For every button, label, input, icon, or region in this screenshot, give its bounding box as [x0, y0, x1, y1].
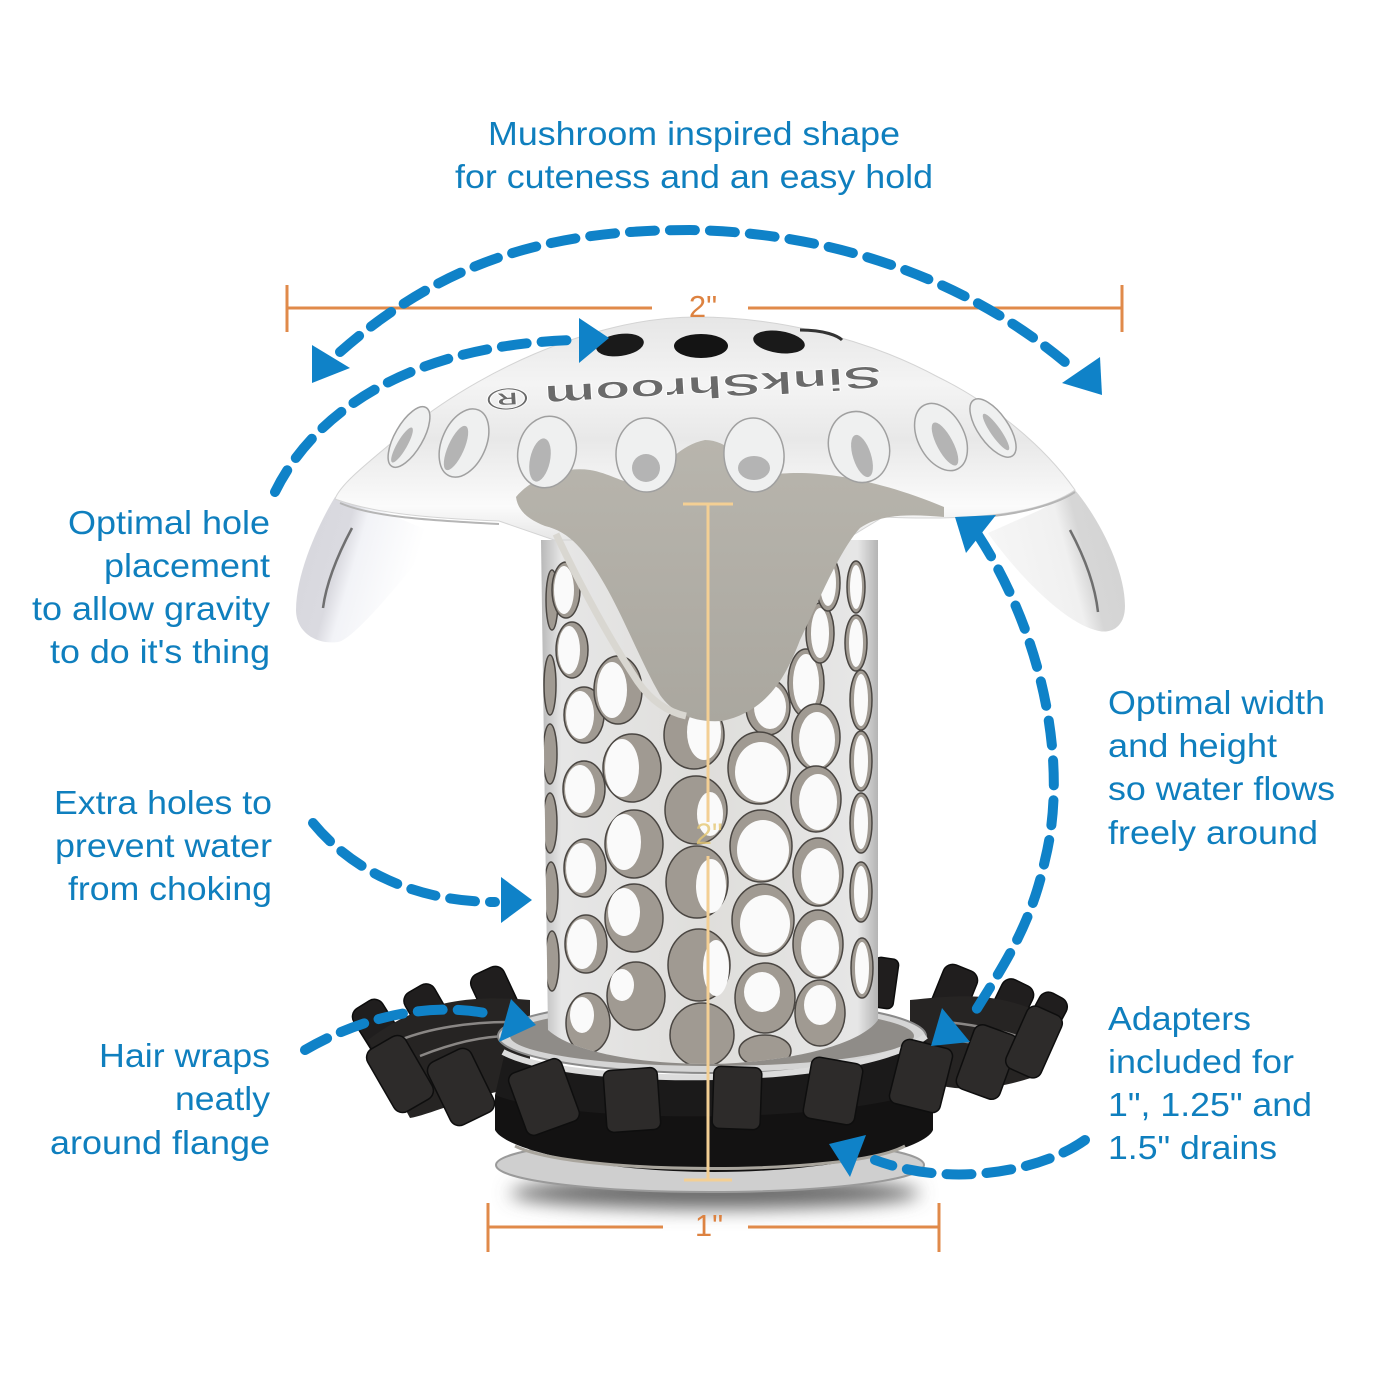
arrow: adapters — [829, 1135, 1085, 1177]
title: for cuteness and an easy hold — [455, 158, 933, 195]
embossed brand text: SinkShroom ® — [485, 359, 883, 417]
rim shadow line — [340, 492, 1075, 524]
grey underside drop — [516, 440, 944, 721]
text: extra holes: from choking — [68, 870, 272, 907]
arrow: hole placement — [275, 318, 609, 492]
text: hair wraps: around flange — [50, 1124, 270, 1161]
text: adapters: Adapters — [1108, 1000, 1251, 1037]
text: hair wraps — [50, 1037, 271, 1161]
arrow: mushroom shape arc — [312, 230, 1102, 395]
text: adapters: included for — [1108, 1043, 1294, 1080]
rim holes — [380, 392, 1025, 494]
arrow: hair wraps — [305, 999, 536, 1050]
right lobe streak — [1070, 530, 1098, 612]
text: optimal hole placement: to do it's thing — [50, 633, 270, 670]
text: optimal width and height: Optimal width — [1108, 684, 1325, 721]
left lobe — [296, 497, 438, 642]
text: optimal hole placement — [32, 504, 271, 670]
dome — [335, 317, 1075, 540]
base plate and rubber gasket — [495, 1036, 940, 1192]
text: optimal width and height: so water flows — [1108, 770, 1335, 807]
right lobe — [988, 490, 1125, 632]
text: extra holes: prevent water — [55, 827, 272, 864]
title: Mushroom inspired shape — [488, 115, 900, 152]
text: optimal hole placement: Optimal hole — [68, 504, 270, 541]
left lobe streak — [323, 528, 352, 608]
mushroom cap — [296, 317, 1125, 721]
text: adapters — [1108, 1000, 1312, 1166]
text: optimal hole placement: to allow gravity — [32, 590, 271, 627]
width dimension: 2 inch — [287, 285, 1122, 332]
text: optimal width and height: and height — [1108, 727, 1277, 764]
text: hair wraps: Hair wraps — [99, 1037, 270, 1074]
silver inner ring — [498, 999, 926, 1073]
text: optimal width and height: freely around — [1108, 814, 1318, 851]
base shadow — [510, 1177, 920, 1209]
title — [455, 115, 933, 195]
text: optimal width and height — [1108, 684, 1335, 851]
drop rim highlight — [556, 534, 686, 716]
rubber adapter: back teeth — [349, 957, 1071, 1118]
width dimension: 2 inch: 2" — [689, 289, 717, 324]
text: adapters: 1.5" drains — [1108, 1129, 1277, 1166]
arrow: extra holes — [313, 823, 532, 923]
height dimension: 2 inch — [683, 504, 733, 1180]
top holes — [595, 327, 842, 359]
text: extra holes — [54, 784, 272, 907]
rubber adapter: front teeth — [363, 1003, 1065, 1138]
height dimension: 2 inch: 2" — [695, 818, 723, 851]
flange sides — [368, 998, 530, 1118]
width dimension: 1 inch: 1" — [695, 1208, 723, 1243]
product: sink strainer — [296, 317, 1125, 1209]
arrow: width and height — [931, 515, 1054, 1046]
text: extra holes: Extra holes to — [54, 784, 272, 821]
width dimension: 1 inch — [488, 1203, 939, 1252]
stem holes — [543, 555, 873, 1067]
text: hair wraps: neatly — [175, 1080, 271, 1117]
text: optimal hole placement: placement — [104, 547, 270, 584]
text: adapters: 1", 1.25" and — [1108, 1086, 1312, 1123]
ring interior — [510, 1006, 914, 1066]
stem: perforated cylinder — [541, 540, 878, 1070]
